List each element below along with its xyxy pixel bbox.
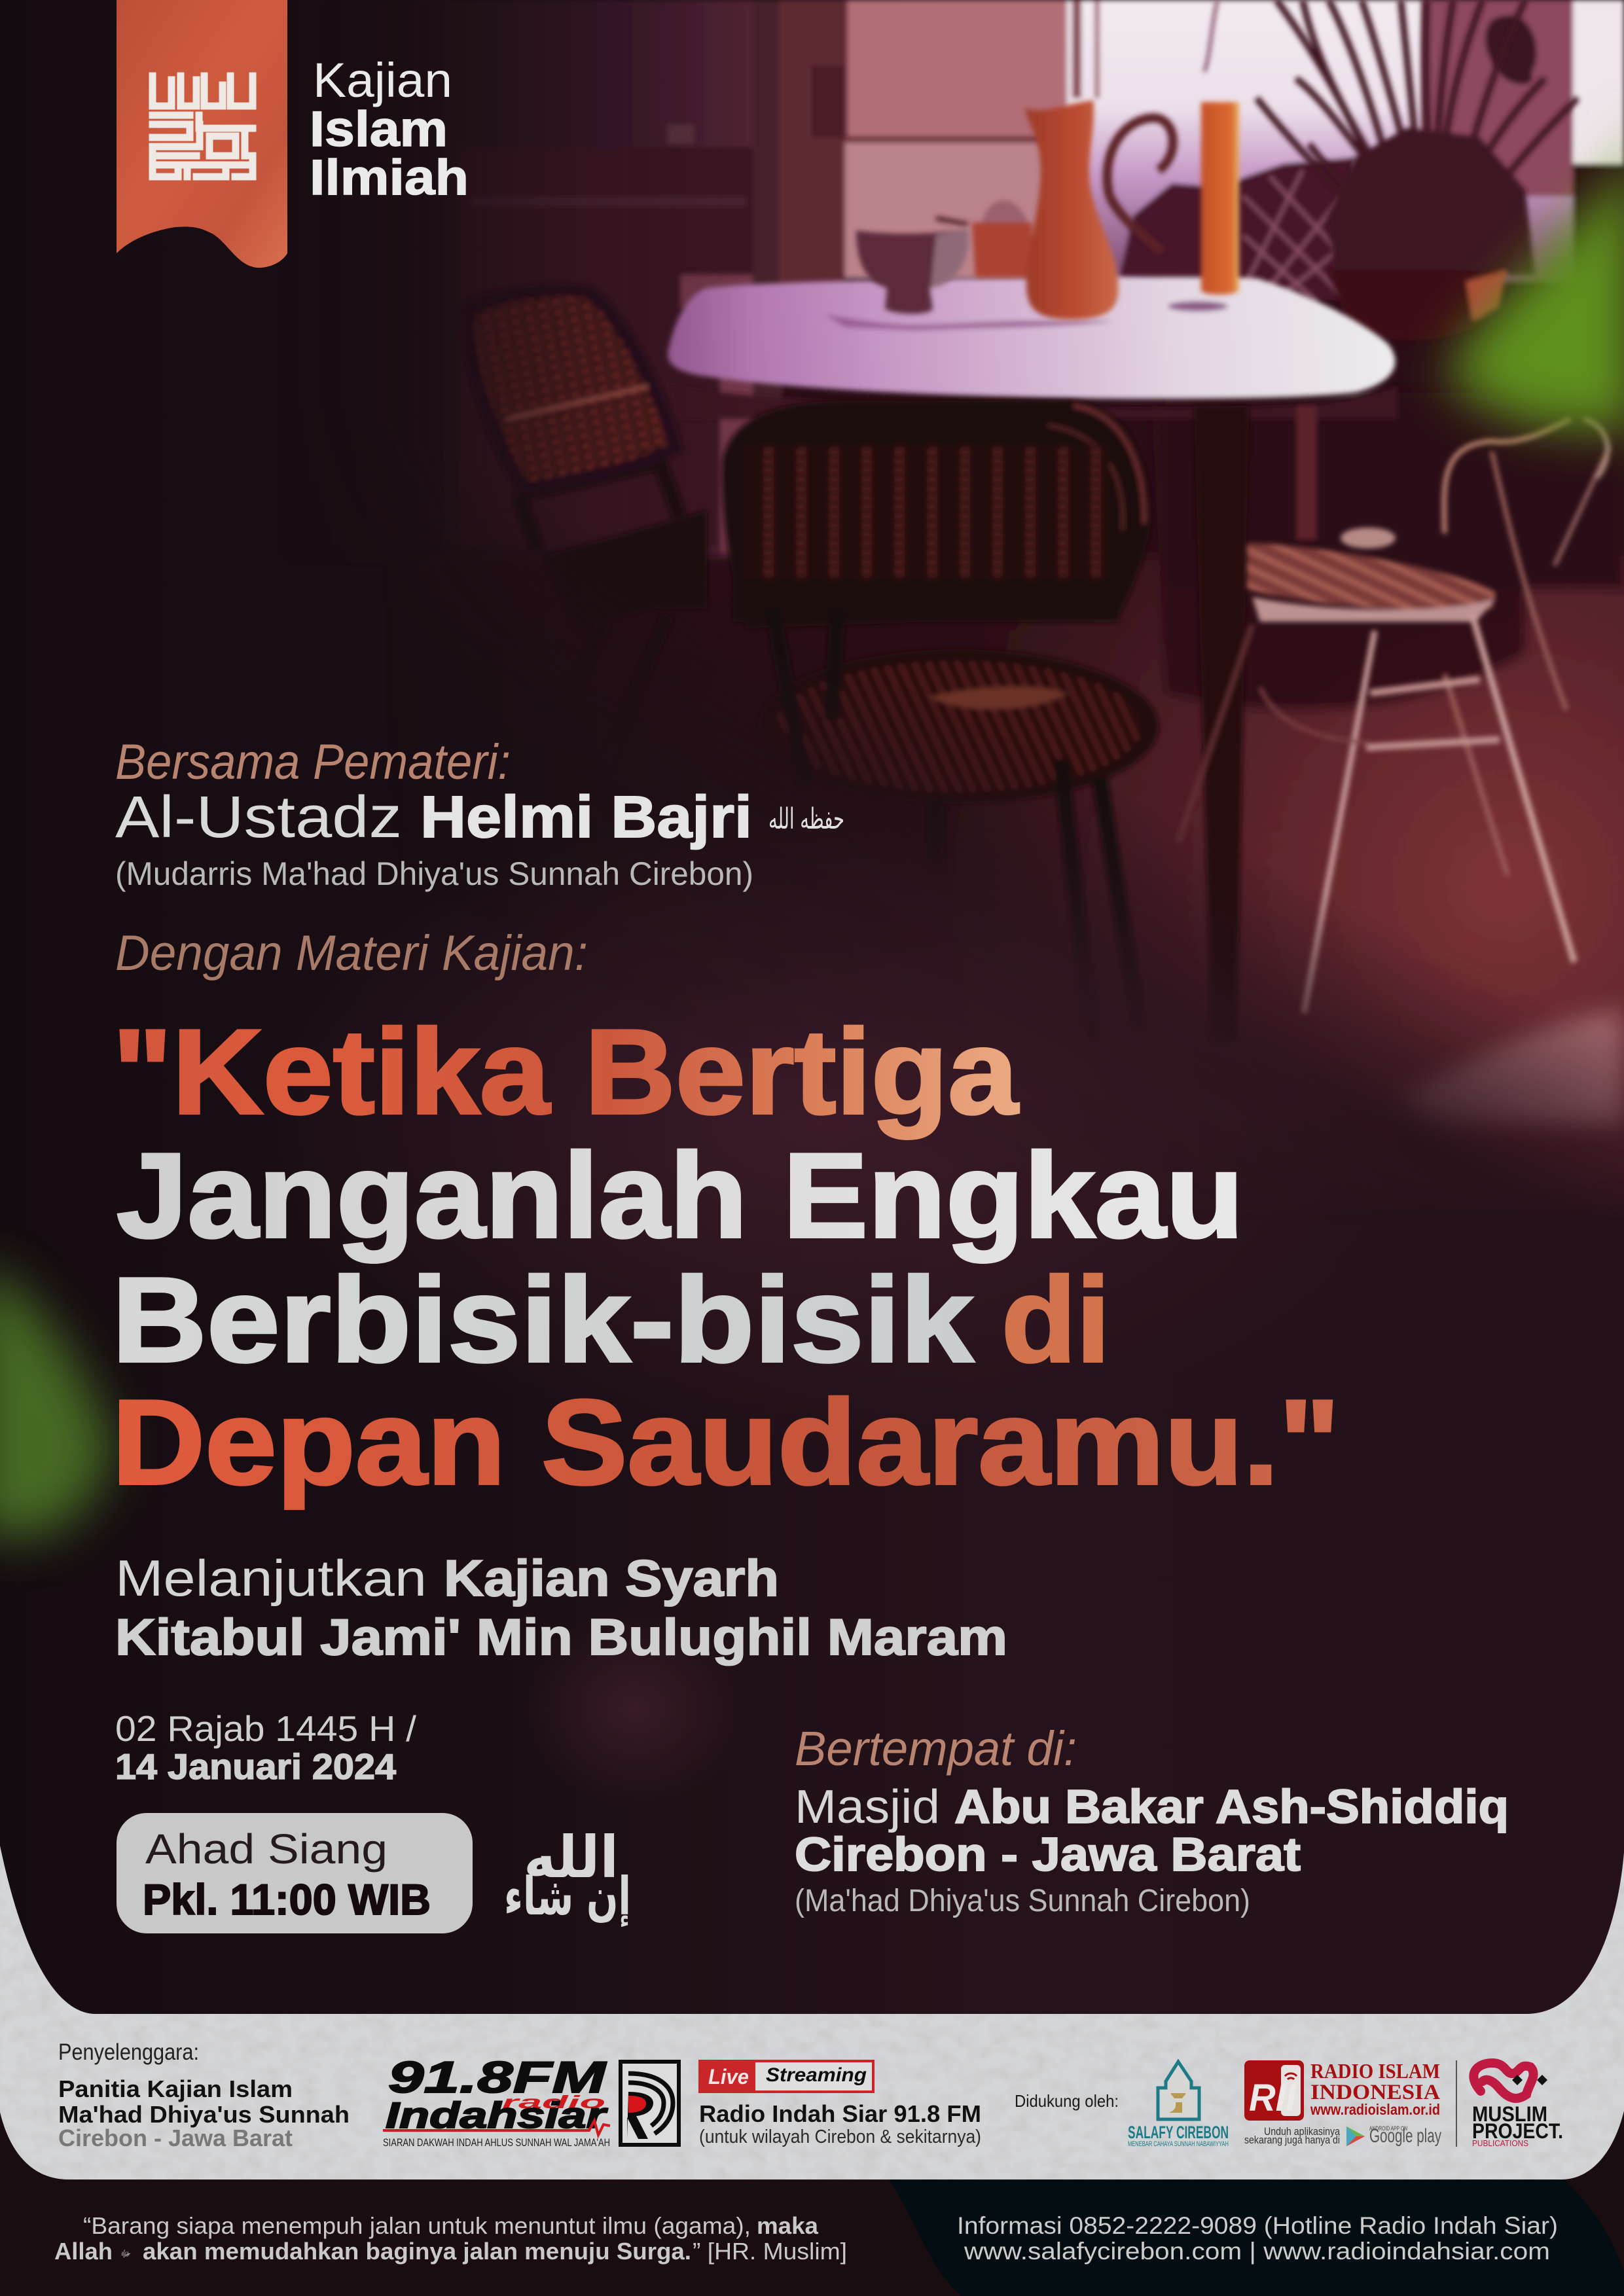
venue name: Cirebon - Jawa Barat xyxy=(795,1829,1301,1881)
logo: Radio Islam Indonesia: RII xyxy=(1249,2077,1297,2119)
scene: table top xyxy=(668,277,1398,419)
logo: Muslim Project: MUSLIM xyxy=(1472,2102,1547,2126)
venue name xyxy=(795,1781,1509,1881)
label: Bersama Pemateri: Bersama Pemateri: xyxy=(115,734,511,790)
label: Didukung oleh: Didukung oleh: xyxy=(1015,2091,1119,2111)
radio info text: Radio Indah Siar 91.8 FM xyxy=(699,2100,981,2127)
live streaming badge: Live xyxy=(708,2065,749,2089)
logo: Radio Islam Indonesia: RADIO ISLAM xyxy=(1310,2059,1440,2083)
logo: Radio Islam Indonesia xyxy=(1244,2059,1441,2147)
heading: Kajian Islam Ilmiah: Ilmiah xyxy=(310,150,469,206)
honorific: hafizhahullah: حفظه الله xyxy=(768,802,844,836)
upper pink cabinet xyxy=(848,0,1067,140)
footer quote hadith xyxy=(54,2212,847,2265)
date block: 02 Rajab 1445 H / xyxy=(115,1708,417,1749)
scene: bowl, cup, vase and candle xyxy=(856,100,1239,319)
scene: pale floor light patch xyxy=(1394,1008,1624,1126)
banner ribbon xyxy=(117,0,287,268)
logo: Muslim Project: PUBLICATIONS xyxy=(1472,2138,1528,2148)
logo: Salafy Cirebon: MENEBAR CAHAYA SUNNAH NABAWIYYAH xyxy=(1128,2140,1229,2148)
logo: Salafy Cirebon xyxy=(1128,2062,1229,2148)
main title xyxy=(112,1004,1340,1509)
footer quote hadith: akan memudahkan baginya jalan menuju Surga. xyxy=(143,2238,691,2265)
logo: Radio Indah Siar 91.8 FM xyxy=(383,2053,610,2149)
footer band: teal dark contact panel xyxy=(884,2173,1624,2296)
scene: right stool xyxy=(1178,419,1610,1013)
scene: potted plant xyxy=(1204,0,1578,340)
logo: Radio Islam Indonesia: www.radioislam.or.id xyxy=(1310,2101,1440,2118)
main title: di xyxy=(1001,1252,1110,1387)
pot xyxy=(1329,270,1506,340)
speaker affiliation: (Mudarris Ma'had Dhiya'us Sunnah Cirebon) xyxy=(115,855,753,892)
scene: table legs xyxy=(1194,406,1317,1041)
glow: small maroon spot xyxy=(556,1640,711,1776)
venue name: Masjid xyxy=(795,1781,940,1833)
footer quote hadith: ” [HR. Muslim] xyxy=(693,2238,847,2265)
foliage behind table xyxy=(1119,157,1355,301)
footer: grey paper band xyxy=(0,1826,1624,2183)
organiser xyxy=(58,2039,350,2151)
organiser: Cirebon - Jawa Barat xyxy=(58,2125,293,2151)
footer quote hadith: “Barang siapa menempuh jalan untuk menuntut ilmu (agama), xyxy=(83,2212,751,2239)
contact information xyxy=(957,2212,1558,2265)
date block xyxy=(115,1708,417,1787)
logo: Muslim Project: PROJECT. xyxy=(1472,2119,1563,2143)
time pill: Ahad Siang xyxy=(145,1825,388,1873)
footer quote hadith: Allah xyxy=(54,2238,113,2265)
photo: dining room scene xyxy=(458,0,1624,1206)
subtitle: kitab series: Kitabul Jami' Min Bulughil Maram xyxy=(115,1608,1007,1666)
logo: Radio Indah Siar 91.8 FM: SIARAN DAKWAH INDAH AHLUS SUNNAH WAL JAMA'AH xyxy=(383,2136,610,2149)
contact information: Informasi 0852-2222-9089 (Hotline Radio Indah Siar) xyxy=(957,2212,1558,2239)
organiser: Panitia Kajian Islam xyxy=(58,2075,293,2102)
date block: 14 Januari 2024 xyxy=(115,1746,396,1787)
venue note: (Ma'had Dhiya'us Sunnah Cirebon) xyxy=(795,1884,1250,1918)
logo: Radio Islam Indonesia: sekarang juga hanya di xyxy=(1244,2134,1340,2146)
green blur: left foliage xyxy=(0,1263,111,1538)
logo: Radio Islam Indonesia: Google play xyxy=(1369,2125,1441,2147)
scene: centre chair xyxy=(722,401,1159,1041)
scene: wall and cabinets xyxy=(457,0,1624,561)
logo: Radio Indah Siar 91.8 FM: Indahsiar xyxy=(386,2094,608,2136)
main title: Berbisik-bisik xyxy=(112,1252,974,1387)
live streaming badge: Streaming xyxy=(766,2064,867,2086)
calligraphy: insya Allah: إن شاء xyxy=(504,1866,631,1928)
main title: "Ketika Bertiga xyxy=(113,1004,1019,1139)
column xyxy=(779,0,844,327)
logo: R square icon xyxy=(621,2062,679,2145)
divider between sponsor logos xyxy=(1456,2060,1457,2147)
glow: maroon centre xyxy=(384,914,1195,1339)
subtitle: kitab series: Melanjutkan xyxy=(115,1549,427,1607)
heading: Kajian Islam Ilmiah: Kajian xyxy=(313,53,452,107)
scene: left chair xyxy=(460,283,707,785)
window xyxy=(1067,0,1591,281)
scene: floor and shadow zone xyxy=(393,393,1624,1211)
speaker name: Al-Ustadz xyxy=(115,785,402,850)
logo: Radio Islam Indonesia: Unduh aplikasinya xyxy=(1264,2125,1340,2138)
logo: Radio Indah Siar 91.8 FM: radio xyxy=(502,2092,605,2112)
banner: orange ribbon shape xyxy=(117,0,287,268)
label: Bertempat di: Bertempat di: xyxy=(795,1721,1077,1776)
calligraphy: insya Allah xyxy=(504,1823,631,1928)
main title: Janganlah Engkau xyxy=(117,1128,1244,1263)
label: Dengan Materi Kajian: Dengan Materi Kajian: xyxy=(115,925,588,981)
speaker name: Helmi Bajri xyxy=(420,785,752,850)
contact information: www.salafycirebon.com | www.radioindahsiar.com xyxy=(964,2238,1550,2265)
time pill xyxy=(117,1813,473,1933)
logo: Radio Indah Siar 91.8 FM: 91.8FM xyxy=(388,2053,607,2102)
venue block xyxy=(795,1721,1509,1918)
logo: Radio Islam Indonesia: INDONESIA xyxy=(1310,2081,1440,2104)
venue name: Abu Bakar Ash-Shiddiq xyxy=(954,1781,1509,1833)
main title: Depan Saudaramu." xyxy=(112,1374,1340,1509)
subtitle: kitab series: Kajian Syarh xyxy=(444,1549,779,1607)
organiser: Ma'had Dhiya'us Sunnah xyxy=(58,2101,350,2128)
speaker block xyxy=(115,734,844,892)
speaker name xyxy=(115,785,752,850)
radio info text xyxy=(699,2100,981,2147)
logo: Salafy Cirebon: SALAFY CIREBON xyxy=(1128,2123,1229,2142)
cabinet lower left xyxy=(652,147,754,547)
organiser: Penyelenggara: xyxy=(58,2039,199,2065)
green blur: right foliage xyxy=(1447,111,1624,432)
time pill: Pkl. 11:00 WIB xyxy=(143,1875,431,1924)
logo: Muslim Project xyxy=(1472,2063,1563,2148)
footer quote hadith: ﷻ xyxy=(120,2249,131,2259)
live streaming badge xyxy=(699,2060,873,2092)
calligraphy: insya Allah: الله xyxy=(524,1823,619,1891)
radio info text: (untuk wilayah Cirebon & sekitarnya) xyxy=(699,2126,981,2147)
icon: Google Play triangle xyxy=(1346,2126,1365,2146)
footer quote hadith: maka xyxy=(757,2212,819,2239)
heading: Kajian Islam Ilmiah: Islam xyxy=(310,101,448,157)
subtitle: kitab series xyxy=(115,1549,1007,1666)
logo: Radio Islam Indonesia: ANDROID APP ON xyxy=(1369,2125,1407,2132)
wall right of plant xyxy=(1420,0,1573,196)
heading: Kajian Islam Ilmiah xyxy=(310,53,469,206)
banner: kufic calligraphy mark xyxy=(153,76,253,177)
